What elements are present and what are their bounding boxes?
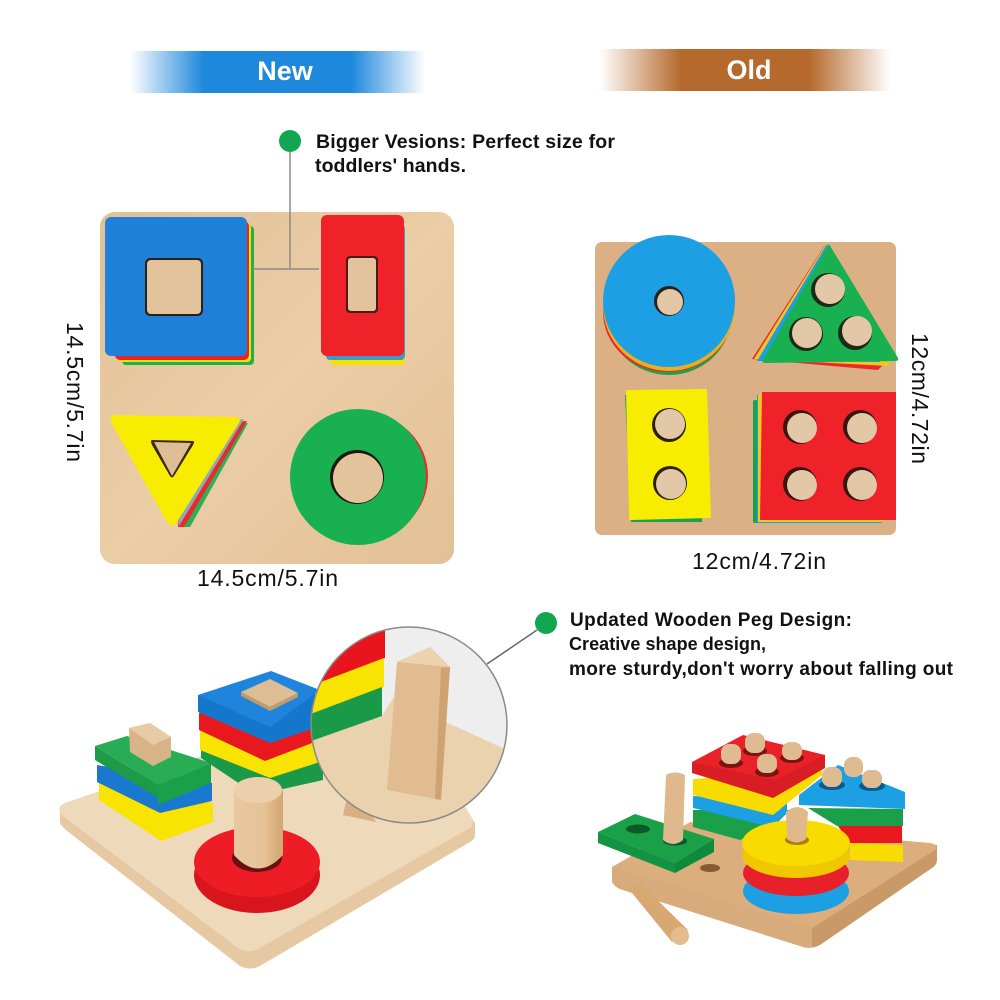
blue circle stack — [603, 235, 735, 375]
board hole — [700, 864, 720, 872]
wooden board — [612, 845, 937, 948]
blue square stack — [105, 217, 254, 365]
callout: wooden peg design: Updated Wooden Peg Design: — [570, 610, 852, 631]
callout: wooden peg design: Creative shape design, — [569, 634, 766, 654]
red rectangle stack — [321, 215, 405, 365]
old toy top view — [595, 235, 898, 535]
round stack — [742, 807, 850, 914]
green flat piece — [598, 772, 714, 873]
new toy top view — [100, 212, 454, 564]
callout: bigger versions — [253, 130, 615, 269]
yellow triangle stack — [110, 415, 248, 527]
green triangle stack — [752, 244, 898, 370]
banner: Old — [600, 49, 890, 91]
dimension: height new: 14.5cm/5.7in — [62, 322, 88, 462]
new toy perspective view — [59, 620, 507, 968]
banner: New: New — [257, 56, 314, 86]
red square stack — [753, 392, 896, 523]
callout: bigger versions: toddlers' hands. — [315, 155, 466, 177]
dimension: width new: 14.5cm/5.7in — [197, 565, 338, 591]
banner: New — [130, 51, 425, 93]
yellow rectangle stack — [625, 389, 711, 522]
red square stack — [692, 733, 825, 840]
dimension: height old: 12cm/4.72in — [907, 333, 933, 464]
callout: wooden peg design: more sturdy,don't worry about falling out — [569, 659, 954, 680]
green circle stack — [290, 409, 428, 545]
triangle stack left — [95, 723, 213, 841]
banner: Old: Old — [726, 55, 772, 85]
blue triangle stack — [799, 757, 905, 862]
callout: wooden peg design — [487, 610, 954, 680]
old toy perspective view — [598, 733, 937, 948]
small peg under magnifier — [343, 798, 376, 822]
wooden board — [100, 212, 454, 564]
lying peg — [628, 883, 689, 945]
wooden board — [60, 690, 475, 968]
callout: bigger versions: Bigger Vesions: Perfect size for — [316, 131, 615, 153]
red ring with peg — [194, 777, 320, 913]
wooden board — [595, 242, 896, 535]
dimension: width old: 12cm/4.72in — [692, 548, 826, 574]
square stack center — [198, 671, 323, 789]
magnifier circle — [300, 620, 507, 823]
